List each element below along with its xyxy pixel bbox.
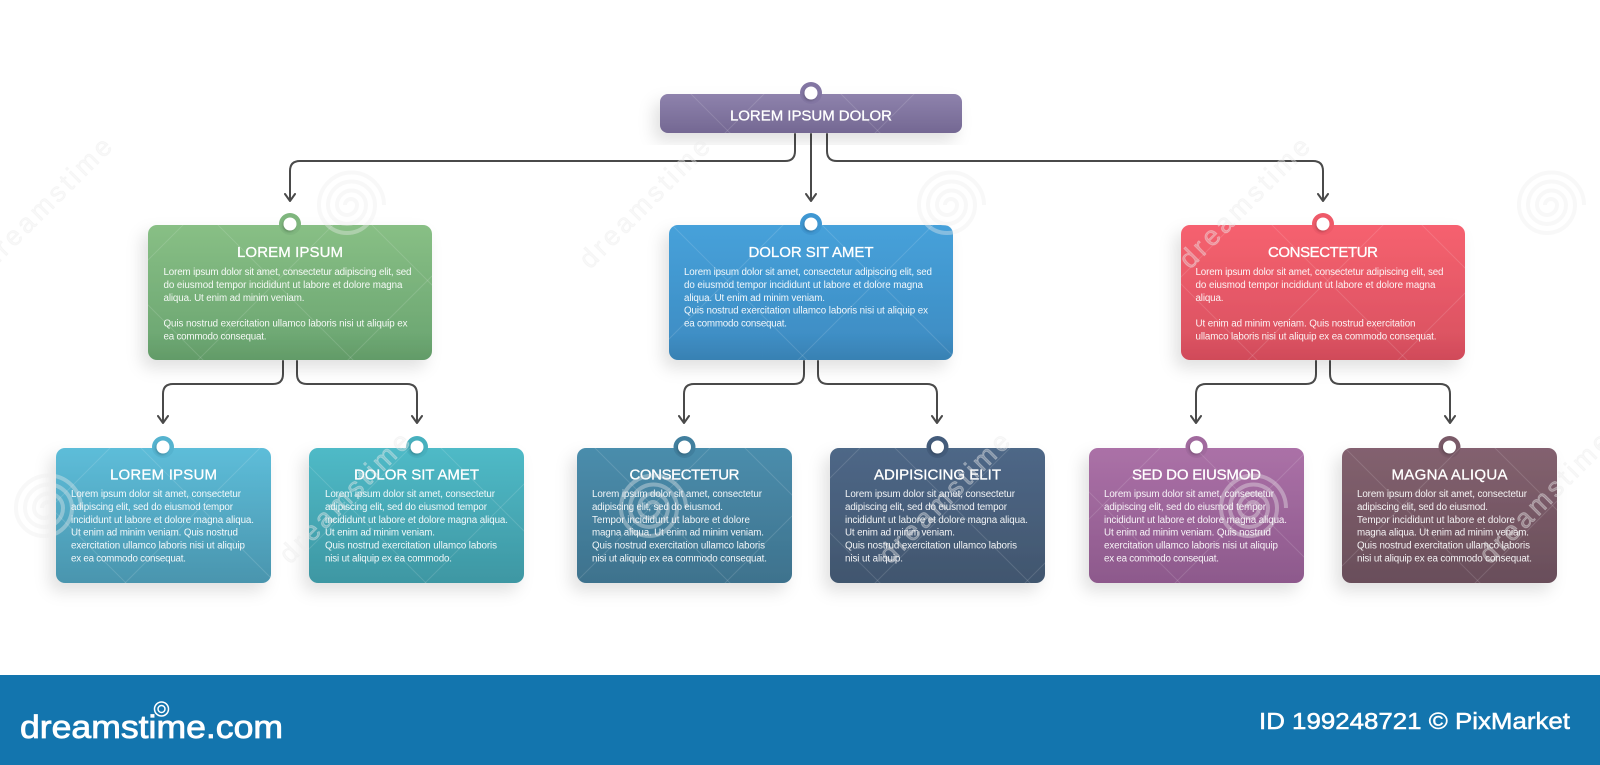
text: light blue card body: ex ea commodo consequat. [71, 554, 186, 564]
text: light blue card body [71, 489, 254, 564]
panel: steel blue card [577, 436, 792, 583]
watermark: diagonal wordmarks: dreamstime [273, 426, 416, 569]
footer logo: dreamstime.com [20, 709, 283, 745]
arrow: red to mauve card [1330, 361, 1455, 423]
text: navy card body [845, 489, 1028, 564]
arrow: red to purple card [1191, 361, 1316, 423]
text: navy card body: Lorem ipsum dolor sit amet, consectetur [845, 489, 1016, 500]
arrow: green to light blue card [158, 361, 283, 423]
text: red body: ullamco laboris nisi ut aliquip ex ea commodo consequat. [1196, 332, 1436, 342]
text: teal card body: incididunt ut labore et dolore magna aliqua. [325, 515, 508, 526]
watermark: diagonal wordmarks: dreamstime [873, 426, 1016, 569]
watermark: diagonal wordmarks: dreamstime [573, 131, 716, 274]
text: green body: Lorem ipsum dolor sit amet, consectetur adipiscing elit, sed [164, 267, 412, 278]
text: purple card body: incididunt ut labore et dolore magna aliqua. [1104, 515, 1287, 526]
text: mauve card body: Lorem ipsum dolor sit amet, consectetur [1357, 489, 1528, 500]
text: green body [164, 267, 412, 342]
text: teal card body [325, 489, 508, 564]
text: light blue card body: incididunt ut labore et dolore magna aliqua. [71, 515, 254, 526]
text: steel blue card body: adipiscing elit, sed do eiusmod. [592, 502, 723, 513]
text: steel blue card body: Quis nostrud exercitation ullamco laboris [592, 540, 765, 552]
text: blue body: ea commodo consequat. [684, 318, 787, 330]
text: teal card body: adipiscing elit, sed do eiusmod tempor [325, 502, 488, 513]
text: purple card body: exercitation ullamco laboris nisi ut aliquip [1104, 540, 1279, 552]
panel: blue [669, 213, 953, 360]
text: blue body [684, 267, 932, 330]
text: teal card body: Ut enim ad minim veniam. [325, 528, 435, 538]
text: purple card body: Ut enim ad minim veniam. Quis nostrud [1104, 528, 1271, 538]
text: light blue card body: exercitation ullamco laboris nisi ut aliquip [71, 540, 246, 552]
panel: mauve card [1342, 436, 1557, 583]
heading: steel blue card: CONSECTETUR [630, 466, 740, 484]
footer image id and credit: ID 199248721 © PixMarket [1259, 708, 1571, 734]
text: steel blue card body [592, 489, 767, 564]
text: steel blue card body: magna aliqua. Ut enim ad minim veniam. [592, 528, 764, 538]
text: mauve card body: magna aliqua. Ut enim ad minim veniam. [1357, 528, 1529, 538]
text: navy card body: adipiscing elit, sed do eiusmod tempor [845, 502, 1008, 513]
watermark: spirals [16, 172, 1584, 536]
text: green body: ea commodo consequat. [164, 332, 266, 342]
arrow: blue to steel blue card [679, 361, 804, 423]
panel: navy card [830, 436, 1045, 583]
panel: root [660, 82, 962, 133]
connectors from root to level two [285, 134, 1328, 201]
text: teal card body: nisi ut aliquip ex ea commodo. [325, 554, 452, 564]
text: green body: aliqua. Ut enim ad minim veniam. [164, 293, 304, 304]
panel: teal card [309, 436, 524, 583]
text: blue body: Quis nostrud exercitation ullamco laboris nisi ut aliquip ex [684, 306, 928, 316]
heading: blue: DOLOR SIT AMET [748, 244, 874, 261]
text: purple card body: adipiscing elit, sed do eiusmod tempor [1104, 502, 1267, 513]
text: red body: Lorem ipsum dolor sit amet, consectetur adipiscing elit, sed [1196, 267, 1444, 278]
text: blue body: aliqua. Ut enim ad minim veniam. [684, 293, 825, 304]
footer band [0, 675, 1600, 765]
heading: purple card: SED DO EIUSMOD [1132, 466, 1261, 484]
arrow: green to teal card [297, 361, 422, 423]
heading: mauve card: MAGNA ALIQUA [1392, 466, 1508, 484]
text: mauve card body [1357, 489, 1532, 564]
text: steel blue card body: Lorem ipsum dolor sit amet, consectetur [592, 489, 763, 500]
text: steel blue card body: Tempor incididunt ut labore et dolore [592, 515, 751, 526]
text: navy card body: Ut enim ad minim veniam. [845, 528, 955, 538]
text: mauve card body: nisi ut aliquip ex ea commodo consequat. [1357, 554, 1532, 564]
text: mauve card body: adipiscing elit, sed do eiusmod. [1357, 502, 1488, 513]
heading: navy card: ADIPISICING ELIT [874, 466, 1001, 484]
panel: light blue card [56, 436, 271, 583]
text: light blue card body: Ut enim ad minim veniam. Quis nostrud [71, 528, 238, 538]
text: light blue card body: adipiscing elit, sed do eiusmod tempor [71, 502, 234, 513]
text: purple card body: ex ea commodo consequat. [1104, 554, 1219, 564]
text: purple card body: Lorem ipsum dolor sit amet, consectetur [1104, 489, 1275, 500]
text: navy card body: incididunt ut labore et dolore magna aliqua. [845, 515, 1028, 526]
icon: logo spiral [154, 702, 168, 716]
text: red body: Ut enim ad minim veniam. Quis nostrud exercitation [1196, 318, 1416, 330]
text: green body: Quis nostrud exercitation ullamco laboris nisi ut aliquip ex [164, 318, 408, 330]
arrow: blue to navy card [818, 361, 942, 423]
text: light blue card body: Lorem ipsum dolor sit amet, consectetur [71, 489, 242, 500]
text: navy card body: nisi ut aliquip. [845, 554, 903, 564]
text: blue body: Lorem ipsum dolor sit amet, consectetur adipiscing elit, sed [684, 267, 932, 278]
heading: red: CONSECTETUR [1268, 244, 1378, 261]
heading: light blue card: LOREM IPSUM [110, 466, 217, 484]
text: blue body: do eiusmod tempor incididunt ut labore et dolore magna [684, 280, 924, 291]
arrow: root to green panel [285, 134, 795, 201]
heading: green: LOREM IPSUM [237, 244, 343, 261]
arrow: root to blue panel [806, 134, 816, 201]
watermark: diagonal wordmarks [0, 131, 1600, 569]
text: steel blue card body: nisi ut aliquip ex ea commodo consequat. [592, 554, 767, 564]
text: navy card body: Quis nostrud exercitation ullamco laboris [845, 540, 1017, 552]
text: mauve card body: Tempor incididunt ut labore et dolore [1357, 515, 1516, 526]
heading: teal card: DOLOR SIT AMET [354, 466, 479, 484]
panel: green [148, 213, 432, 360]
watermark: diagonal wordmarks: dreamstime [1173, 131, 1316, 274]
panel: red [1181, 213, 1465, 360]
text: red body: aliqua. [1196, 293, 1224, 304]
text: red body [1196, 267, 1444, 342]
heading: root: LOREM IPSUM DOLOR [730, 108, 892, 124]
text: green body: do eiusmod tempor incididunt ut labore et dolore magna [164, 280, 403, 291]
arrow: root to red panel [827, 134, 1328, 201]
connectors from level two to level three [158, 361, 1455, 423]
text: red body: do eiusmod tempor incididunt ut labore et dolore magna [1196, 280, 1436, 291]
text: teal card body: Quis nostrud exercitation ullamco laboris [325, 540, 497, 552]
text: purple card body [1104, 489, 1287, 564]
panel: purple card [1089, 436, 1304, 583]
text: teal card body: Lorem ipsum dolor sit amet, consectetur [325, 489, 496, 500]
text: mauve card body: Quis nostrud exercitation ullamco laboris [1357, 540, 1530, 552]
